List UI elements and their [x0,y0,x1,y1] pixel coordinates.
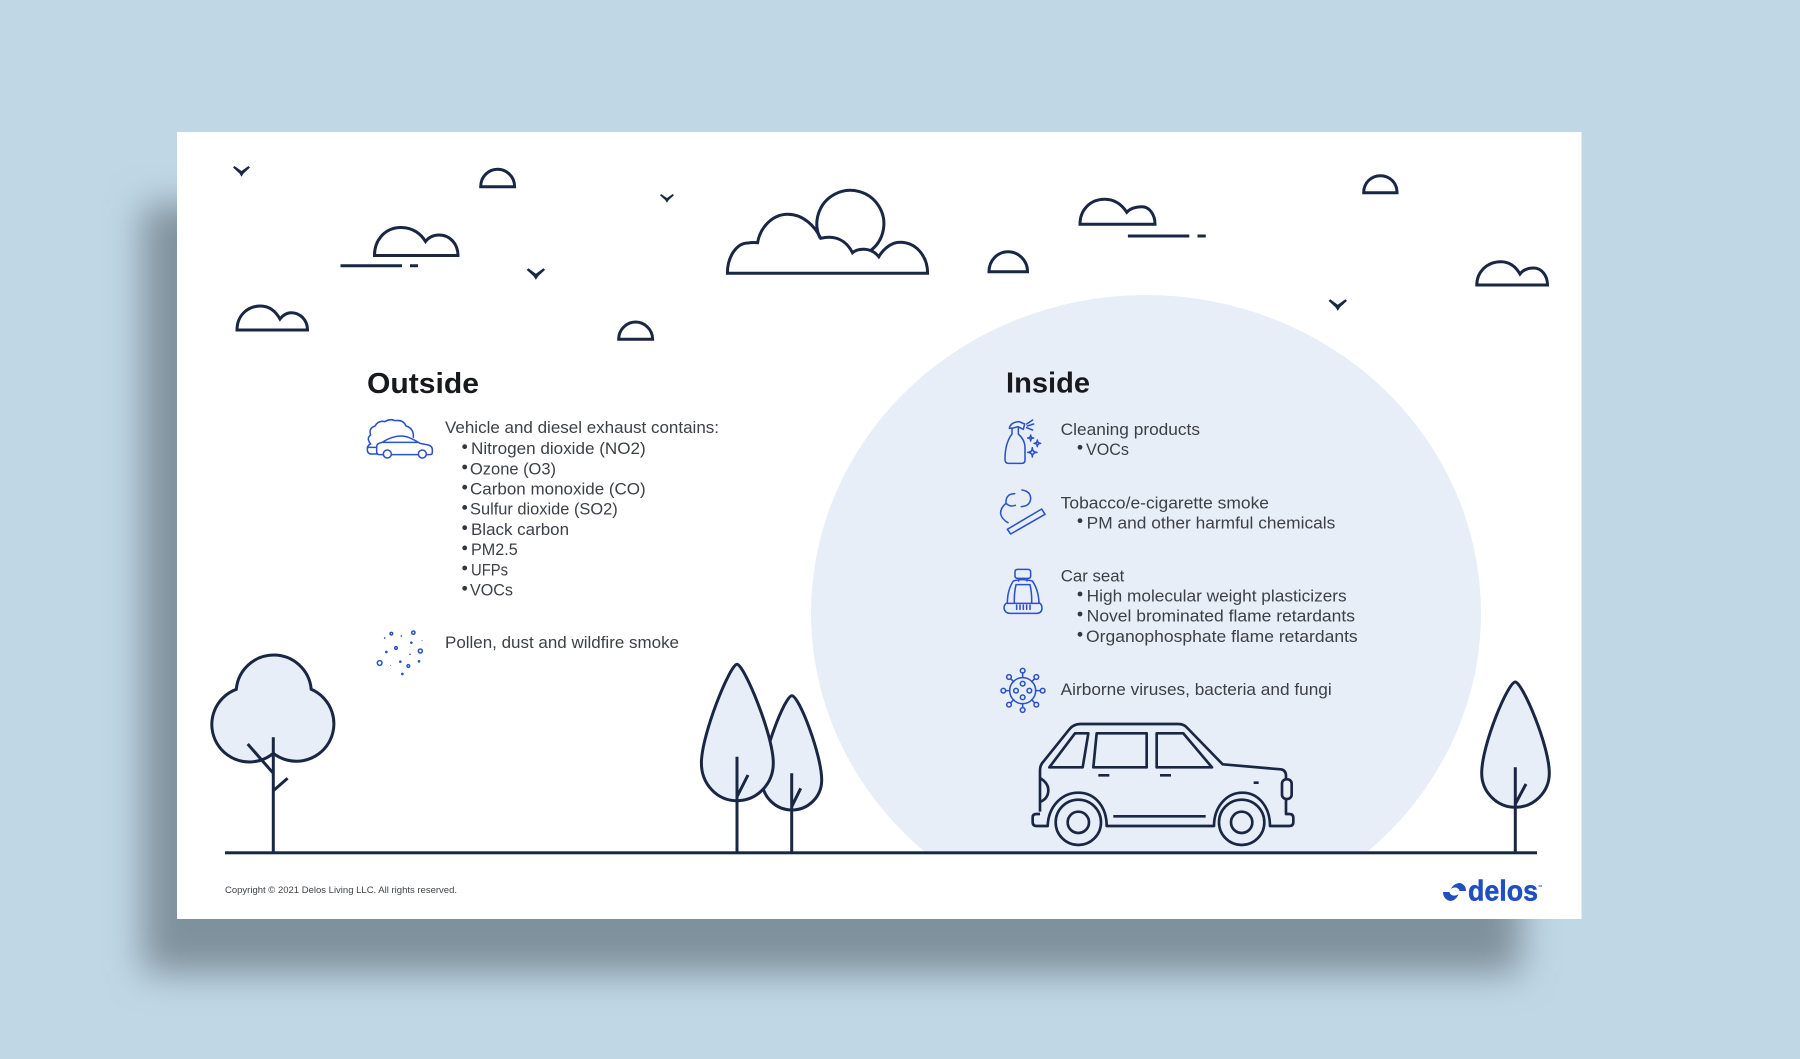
icon: spray bottle [1005,420,1041,463]
tree, right teardrop [1482,682,1549,853]
text block: car seat: High molecular weight plasticizers [1087,587,1347,606]
car illustration [1033,724,1293,845]
text block: vehicle exhaust list: Sulfur dioxide (SO2) [470,500,618,519]
heading: Outside: Outside [367,368,479,400]
text block: car seat [1061,567,1358,646]
big cloud and sun [727,190,928,273]
icon: car exhaust [367,420,432,458]
text block: vehicle exhaust list: Ozone (O3) [470,459,556,478]
bird 2 [660,194,674,203]
tree, left round [212,655,334,853]
bird 4 [1329,299,1347,311]
copyright: Copyright © 2021 Delos Living LLC. All rights reserved. [225,885,457,896]
large inside circle [811,295,1481,852]
ground line [225,851,1537,854]
white card [177,132,1582,919]
text block: cleaning products: VOCs [1086,440,1129,459]
text block: vehicle exhaust list: VOCs [470,581,513,600]
icon: virus [1001,668,1045,712]
text block: vehicle exhaust list [445,418,719,600]
small dome cloud 4 [1364,176,1397,193]
tree, small teardrop behind [762,696,822,853]
icon: pollen and dust particles [377,631,422,675]
text block: vehicle exhaust list: PM2.5 [471,540,518,559]
sky: clouds, domes and birds [233,166,1548,339]
text block: cleaning products [1061,420,1200,459]
text block: tobacco smoke [1061,493,1335,532]
cloud, lower left [237,306,308,330]
icon: car seat [1004,569,1042,613]
cloud with line, right [1080,199,1206,236]
text block: vehicle exhaust list: Vehicle and diesel exhaust contains: [445,418,719,437]
text block: tobacco smoke: Tobacco/e-cigarette smoke [1061,493,1269,512]
text block: car seat: Novel brominated flame retardants [1087,607,1355,626]
heading: Inside: Inside [1006,367,1090,399]
text block: car seat: Organophosphate flame retardants [1086,627,1358,646]
text block: vehicle exhaust list: Black carbon [471,520,569,539]
delos logo: delos [1468,876,1538,908]
cloud with line, left [340,228,458,266]
bird 1 [233,166,250,177]
small dome cloud 2 [619,322,653,339]
cloud, far right [1477,262,1548,285]
tree, tall teardrop [701,664,773,853]
text block: tobacco smoke: PM and other harmful chemicals [1087,513,1335,532]
text: pollen, dust and wildfire smoke: Pollen, dust and wildfire smoke [445,633,679,652]
small dome cloud 3 [989,252,1028,272]
text block: cleaning products: Cleaning products [1061,420,1200,439]
small dome cloud 1 [481,169,515,187]
icon: cigarette smoke [1001,490,1045,534]
text block: car seat: Car seat [1061,567,1125,586]
text: airborne viruses: Airborne viruses, bacteria and fungi [1061,680,1332,699]
text block: vehicle exhaust list: UFPs [471,560,508,579]
card shadow [143,205,1521,973]
text block: vehicle exhaust list: Carbon monoxide (CO) [470,480,646,499]
text block: vehicle exhaust list: Nitrogen dioxide (NO2) [471,439,646,458]
bird 3 [527,268,545,280]
